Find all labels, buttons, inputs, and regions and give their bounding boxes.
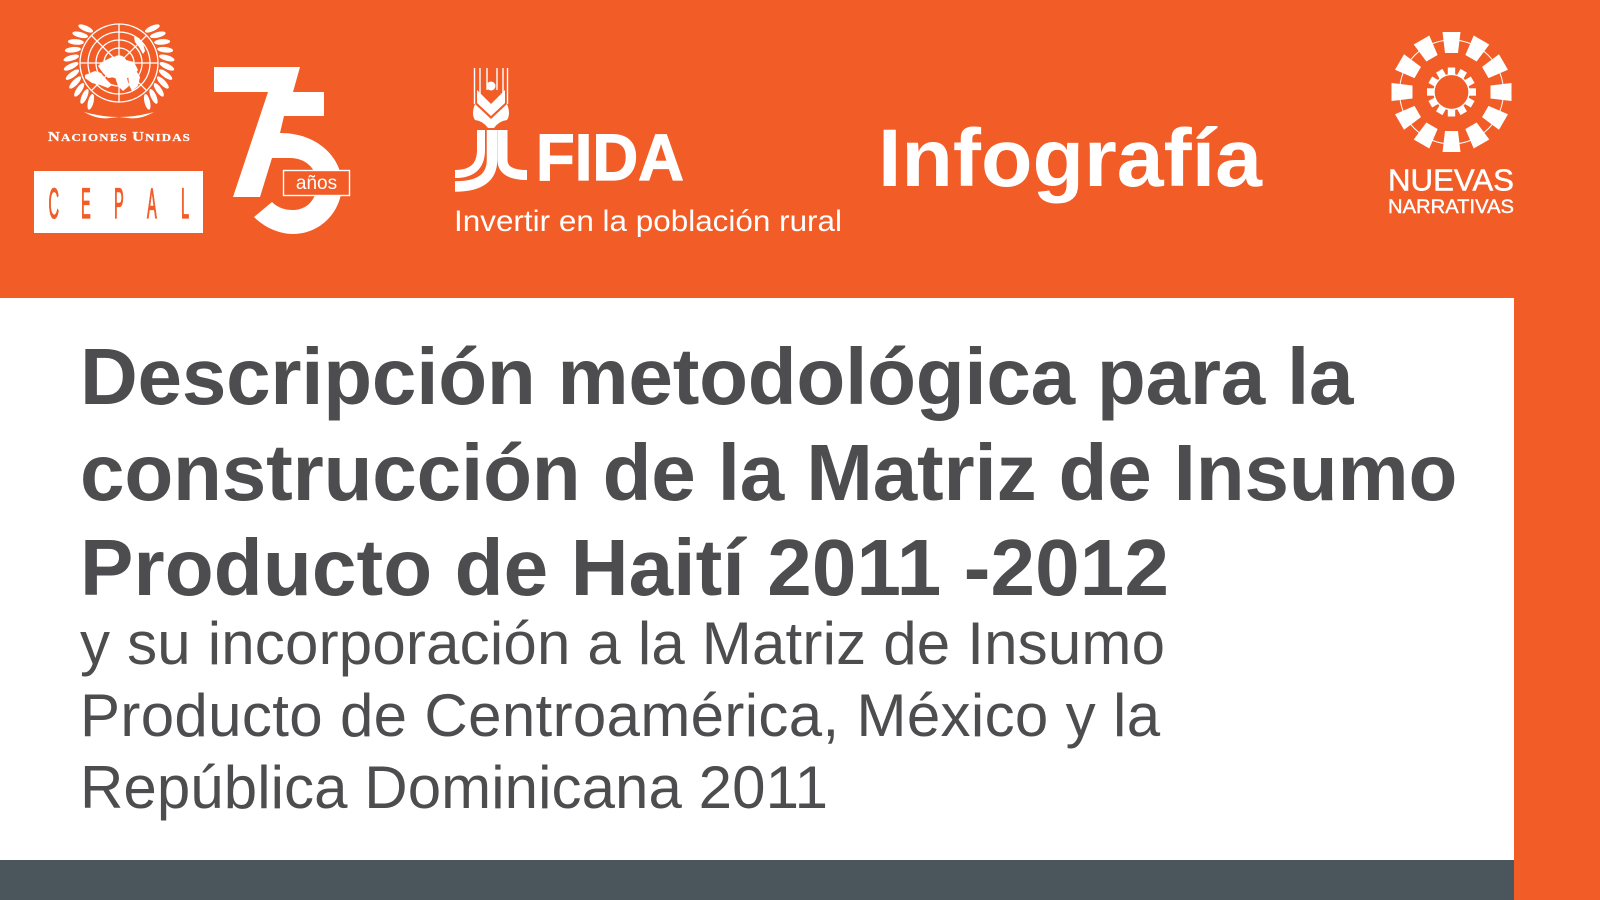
logo: CEPAL box bbox=[34, 171, 203, 233]
logo: CEPAL box: L bbox=[181, 179, 189, 227]
title: Producto de Haití 2011 -2012 bbox=[80, 523, 1169, 612]
text: Naciones Unidas: NACIONES UNIDAS bbox=[48, 130, 191, 145]
heading: Infografía: Infografía bbox=[878, 113, 1263, 204]
icon: FIDA wheat and hands bbox=[455, 68, 527, 186]
logo: CEPAL box: A bbox=[147, 179, 157, 227]
panel: white content area bbox=[0, 298, 1514, 860]
subtitle bbox=[80, 610, 1165, 821]
subtitle: y su incorporación a la Matriz de Insumo bbox=[80, 610, 1165, 677]
footer band bbox=[0, 860, 1514, 900]
text: Nuevas: NUEVAS bbox=[1388, 164, 1514, 198]
title bbox=[80, 332, 1457, 612]
icon: United Nations emblem bbox=[63, 23, 175, 118]
subtitle: República Dominicana 2011 bbox=[80, 754, 828, 821]
logo: CEPAL box: P bbox=[114, 179, 124, 227]
icon: Nuevas Narrativas wheel bbox=[1392, 32, 1512, 152]
subtitle: Producto de Centroamérica, México y la bbox=[80, 682, 1160, 749]
header logos bbox=[34, 23, 1514, 238]
text: Narrativas: NARRATIVAS bbox=[1388, 196, 1514, 218]
logo: CEPAL box: C bbox=[48, 179, 59, 227]
title: Descripción metodológica para la bbox=[80, 332, 1353, 421]
logo: 75 años: años bbox=[296, 173, 337, 194]
text: tagline: Invertir en la población rural bbox=[454, 205, 842, 238]
logo: 75 años bbox=[214, 67, 350, 234]
logo: CEPAL box: E bbox=[81, 179, 91, 227]
text: FIDA: FIDA bbox=[536, 120, 684, 194]
title: construcción de la Matriz de Insumo bbox=[80, 428, 1457, 517]
